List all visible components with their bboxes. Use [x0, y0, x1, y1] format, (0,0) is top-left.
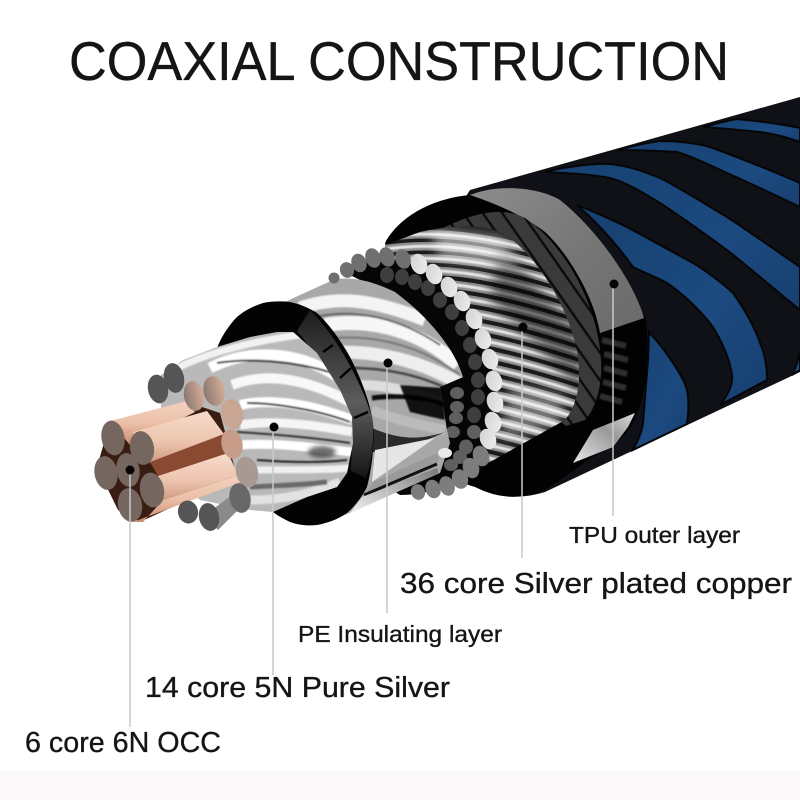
- 6 core copper bundle: [97, 401, 241, 522]
- 14 core strands: [160, 332, 353, 512]
- callout: TPU line: [610, 280, 618, 516]
- 36 core strands: [385, 226, 580, 468]
- callout: 14 core line: [270, 422, 278, 675]
- callout: 36 core line: [518, 322, 528, 558]
- PE ring: [217, 301, 374, 525]
- label: PE Insulating layer: PE Insulating layer: [298, 621, 502, 647]
- 14 core strand ends: [145, 361, 261, 533]
- title: COAXIAL CONSTRUCTION: [69, 30, 729, 92]
- label: 6 core 6N OCC: 6 core 6N OCC: [25, 727, 221, 759]
- inner texture: [600, 340, 628, 402]
- glint on lower jacket: [573, 413, 635, 463]
- hollow behind strand ring: [340, 259, 496, 495]
- 6 core copper ends: [92, 419, 167, 524]
- inner row of strands: [380, 267, 485, 423]
- lower silver strand: [205, 495, 245, 530]
- cable illustration: [92, 97, 800, 533]
- label: 36 core Silver plated copper: 36 core Silver plated copper: [400, 568, 792, 600]
- black interior of jacket: [385, 195, 647, 497]
- ring of 36 core strand ends: [328, 245, 506, 502]
- label: 14 core 5N Pure Silver: 14 core 5N Pure Silver: [145, 672, 450, 704]
- PE insulating layer cylinder: [286, 278, 463, 515]
- label: TPU outer layer: TPU outer layer: [569, 522, 740, 548]
- gray cut jacket layer: [470, 188, 644, 333]
- panel: TPU outer jacket: [400, 97, 800, 496]
- bottom band: [0, 771, 800, 800]
- callout: PE line: [384, 358, 392, 613]
- callout: 6 core line: [126, 466, 134, 727]
- braid shield: [420, 212, 601, 426]
